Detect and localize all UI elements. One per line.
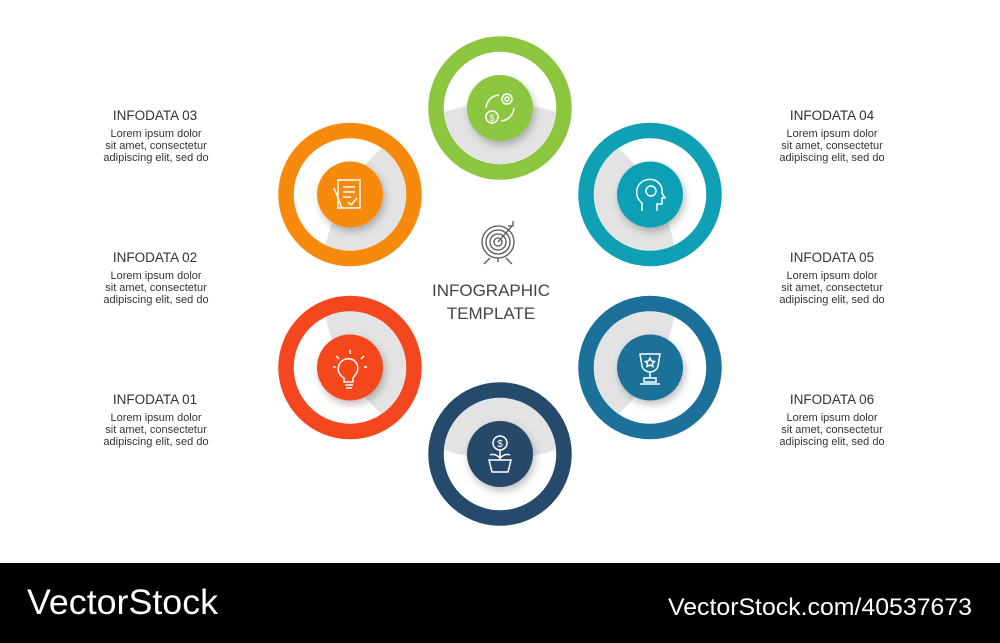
text: infodata 04: sit amet, consectetur xyxy=(781,140,883,152)
text: infodata 01: Lorem ipsum dolor xyxy=(110,412,202,424)
text: infodata 05: adipiscing elit, sed do xyxy=(779,294,885,306)
icon: target (center) xyxy=(482,221,514,264)
text: infodata 03: INFODATA 03 xyxy=(113,108,197,123)
text: infodata 01: adipiscing elit, sed do xyxy=(103,436,209,448)
text: infodata 04: Lorem ipsum dolor xyxy=(786,128,878,140)
text: infodata 02: INFODATA 02 xyxy=(113,250,197,265)
circle: teal (infodata 04) xyxy=(586,130,714,258)
text: infodata 04: adipiscing elit, sed do xyxy=(779,152,885,164)
text: infodata 01: INFODATA 01 xyxy=(113,392,197,407)
text: infodata 05: INFODATA 05 xyxy=(790,250,874,265)
text: infodata 06: sit amet, consectetur xyxy=(781,424,883,436)
footer bar: VectorStock.com/40537673 xyxy=(668,594,972,621)
center title: INFOGRAPHIC xyxy=(432,281,550,300)
text: infodata 02: sit amet, consectetur xyxy=(105,282,207,294)
circle: red (infodata 01) xyxy=(286,304,414,432)
circle: orange (infodata 03) xyxy=(286,130,414,258)
icon: head with gear xyxy=(637,179,665,211)
footer bar xyxy=(0,563,1000,643)
text: infodata 06: INFODATA 06 xyxy=(790,392,874,407)
text: infodata 02 xyxy=(103,250,209,306)
icon: money cycle xyxy=(486,94,514,123)
center title: TEMPLATE xyxy=(447,304,535,323)
text: infodata 05: Lorem ipsum dolor xyxy=(786,270,878,282)
icon: light bulb xyxy=(333,350,367,388)
text: infodata 04 xyxy=(779,108,885,164)
circle: blue (infodata 06) xyxy=(586,304,714,432)
text: infodata 03: sit amet, consectetur xyxy=(105,140,207,152)
text: infodata 02: Lorem ipsum dolor xyxy=(110,270,202,282)
text: infodata 06: Lorem ipsum dolor xyxy=(786,412,878,424)
text: infodata 03: adipiscing elit, sed do xyxy=(103,152,209,164)
text: infodata 01: sit amet, consectetur xyxy=(105,424,207,436)
circle: green (top) xyxy=(436,44,564,172)
icon: money plant xyxy=(489,436,511,472)
circle: navy (bottom): $ xyxy=(497,439,503,450)
center title xyxy=(432,281,550,323)
text: infodata 05 xyxy=(779,250,885,306)
circle: green (top): $ xyxy=(489,113,495,123)
icon: notepad xyxy=(334,180,360,208)
text: infodata 03: Lorem ipsum dolor xyxy=(110,128,202,140)
text: infodata 06 xyxy=(779,392,885,448)
footer bar: VectorStock xyxy=(27,583,219,622)
text: infodata 05: sit amet, consectetur xyxy=(781,282,883,294)
circle: navy (bottom) xyxy=(436,390,564,518)
text: infodata 02: adipiscing elit, sed do xyxy=(103,294,209,306)
text: infodata 06: adipiscing elit, sed do xyxy=(779,436,885,448)
gray inner shading xyxy=(322,103,678,459)
text: infodata 01 xyxy=(103,392,209,448)
text: infodata 04: INFODATA 04 xyxy=(790,108,875,123)
text: infodata 03 xyxy=(103,108,209,164)
icon: trophy xyxy=(640,354,660,384)
